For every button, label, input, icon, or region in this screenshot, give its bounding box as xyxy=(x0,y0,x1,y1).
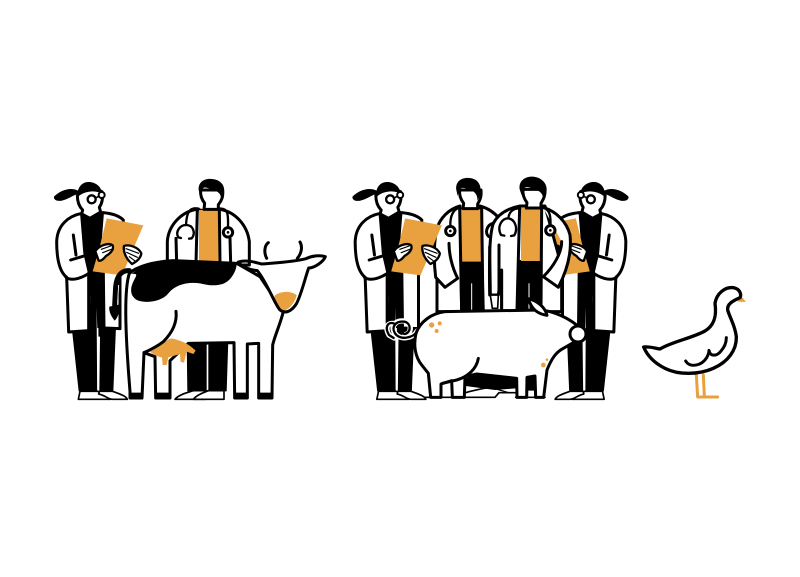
pig ear xyxy=(528,299,547,315)
woman vet left xyxy=(352,182,442,399)
pig tail xyxy=(387,321,418,338)
pig xyxy=(387,299,586,397)
cow xyxy=(109,242,325,399)
hooves xyxy=(130,393,272,399)
scene: vets with cow xyxy=(54,179,325,399)
duck legs xyxy=(696,375,718,397)
pig body xyxy=(415,310,577,397)
scene: vets with pig xyxy=(352,177,629,399)
duck xyxy=(644,288,746,397)
duck wing xyxy=(686,338,726,365)
pig snout xyxy=(570,326,586,342)
cow head xyxy=(238,242,325,312)
black patch xyxy=(131,261,237,302)
pig spots xyxy=(429,321,548,367)
cow body xyxy=(126,261,283,398)
man vet right xyxy=(487,177,570,312)
udder xyxy=(150,338,196,365)
duck beak xyxy=(738,295,746,302)
woman vet right xyxy=(539,182,629,399)
man vet behind cow xyxy=(167,179,249,399)
man vet left xyxy=(434,178,502,312)
woman vet with clipboard xyxy=(54,182,143,399)
cow tail xyxy=(109,271,129,321)
pig under-belly shadow and vets' shoes xyxy=(425,374,545,397)
duck body xyxy=(644,288,741,373)
